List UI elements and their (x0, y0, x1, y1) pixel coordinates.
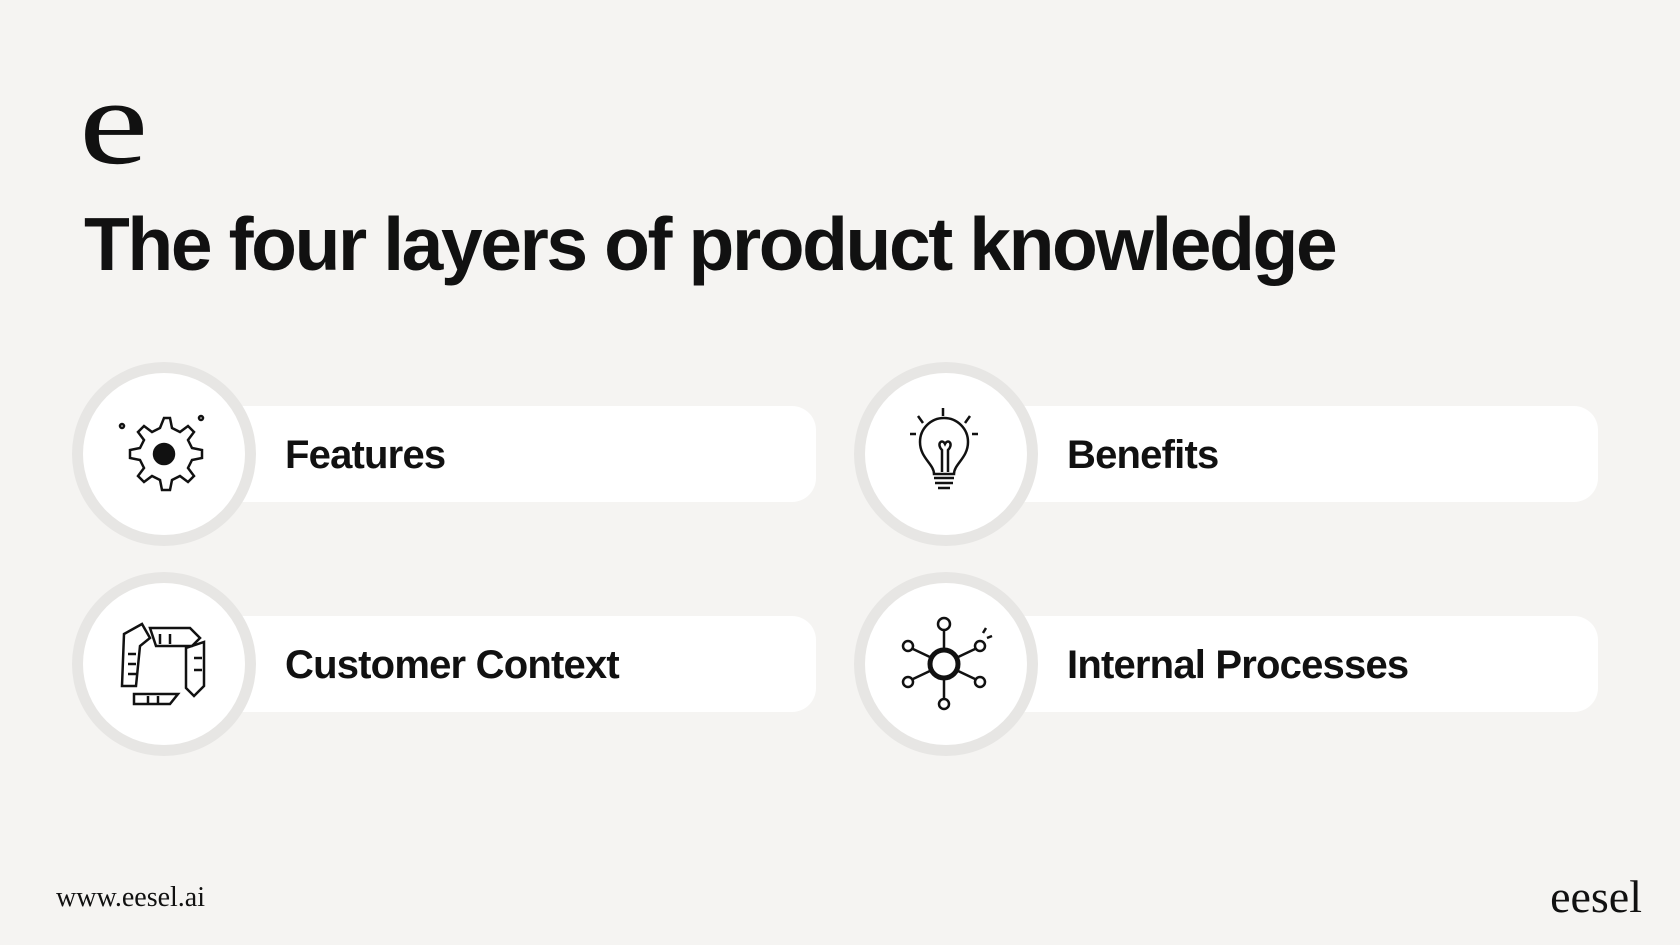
card: internal processes (854, 572, 1598, 756)
footer url: www.eesel.ai (56, 882, 205, 913)
footer brand: eesel (1550, 871, 1642, 922)
card: customer context: Customer Context (285, 643, 619, 687)
card: benefits: Benefits (1067, 433, 1218, 477)
title: The four layers of product knowledge (84, 202, 1335, 286)
card: internal processes: Internal Processes (1067, 643, 1408, 687)
card: customer context (72, 572, 816, 756)
icon: linked hands (120, 622, 206, 706)
card: features: Features (285, 433, 445, 477)
logo mark: e (79, 55, 148, 190)
icon: lightbulb (910, 408, 978, 490)
card: benefits (854, 362, 1598, 546)
icon: gear (118, 414, 204, 492)
card: features (72, 362, 816, 546)
icon: network hub (902, 616, 992, 710)
